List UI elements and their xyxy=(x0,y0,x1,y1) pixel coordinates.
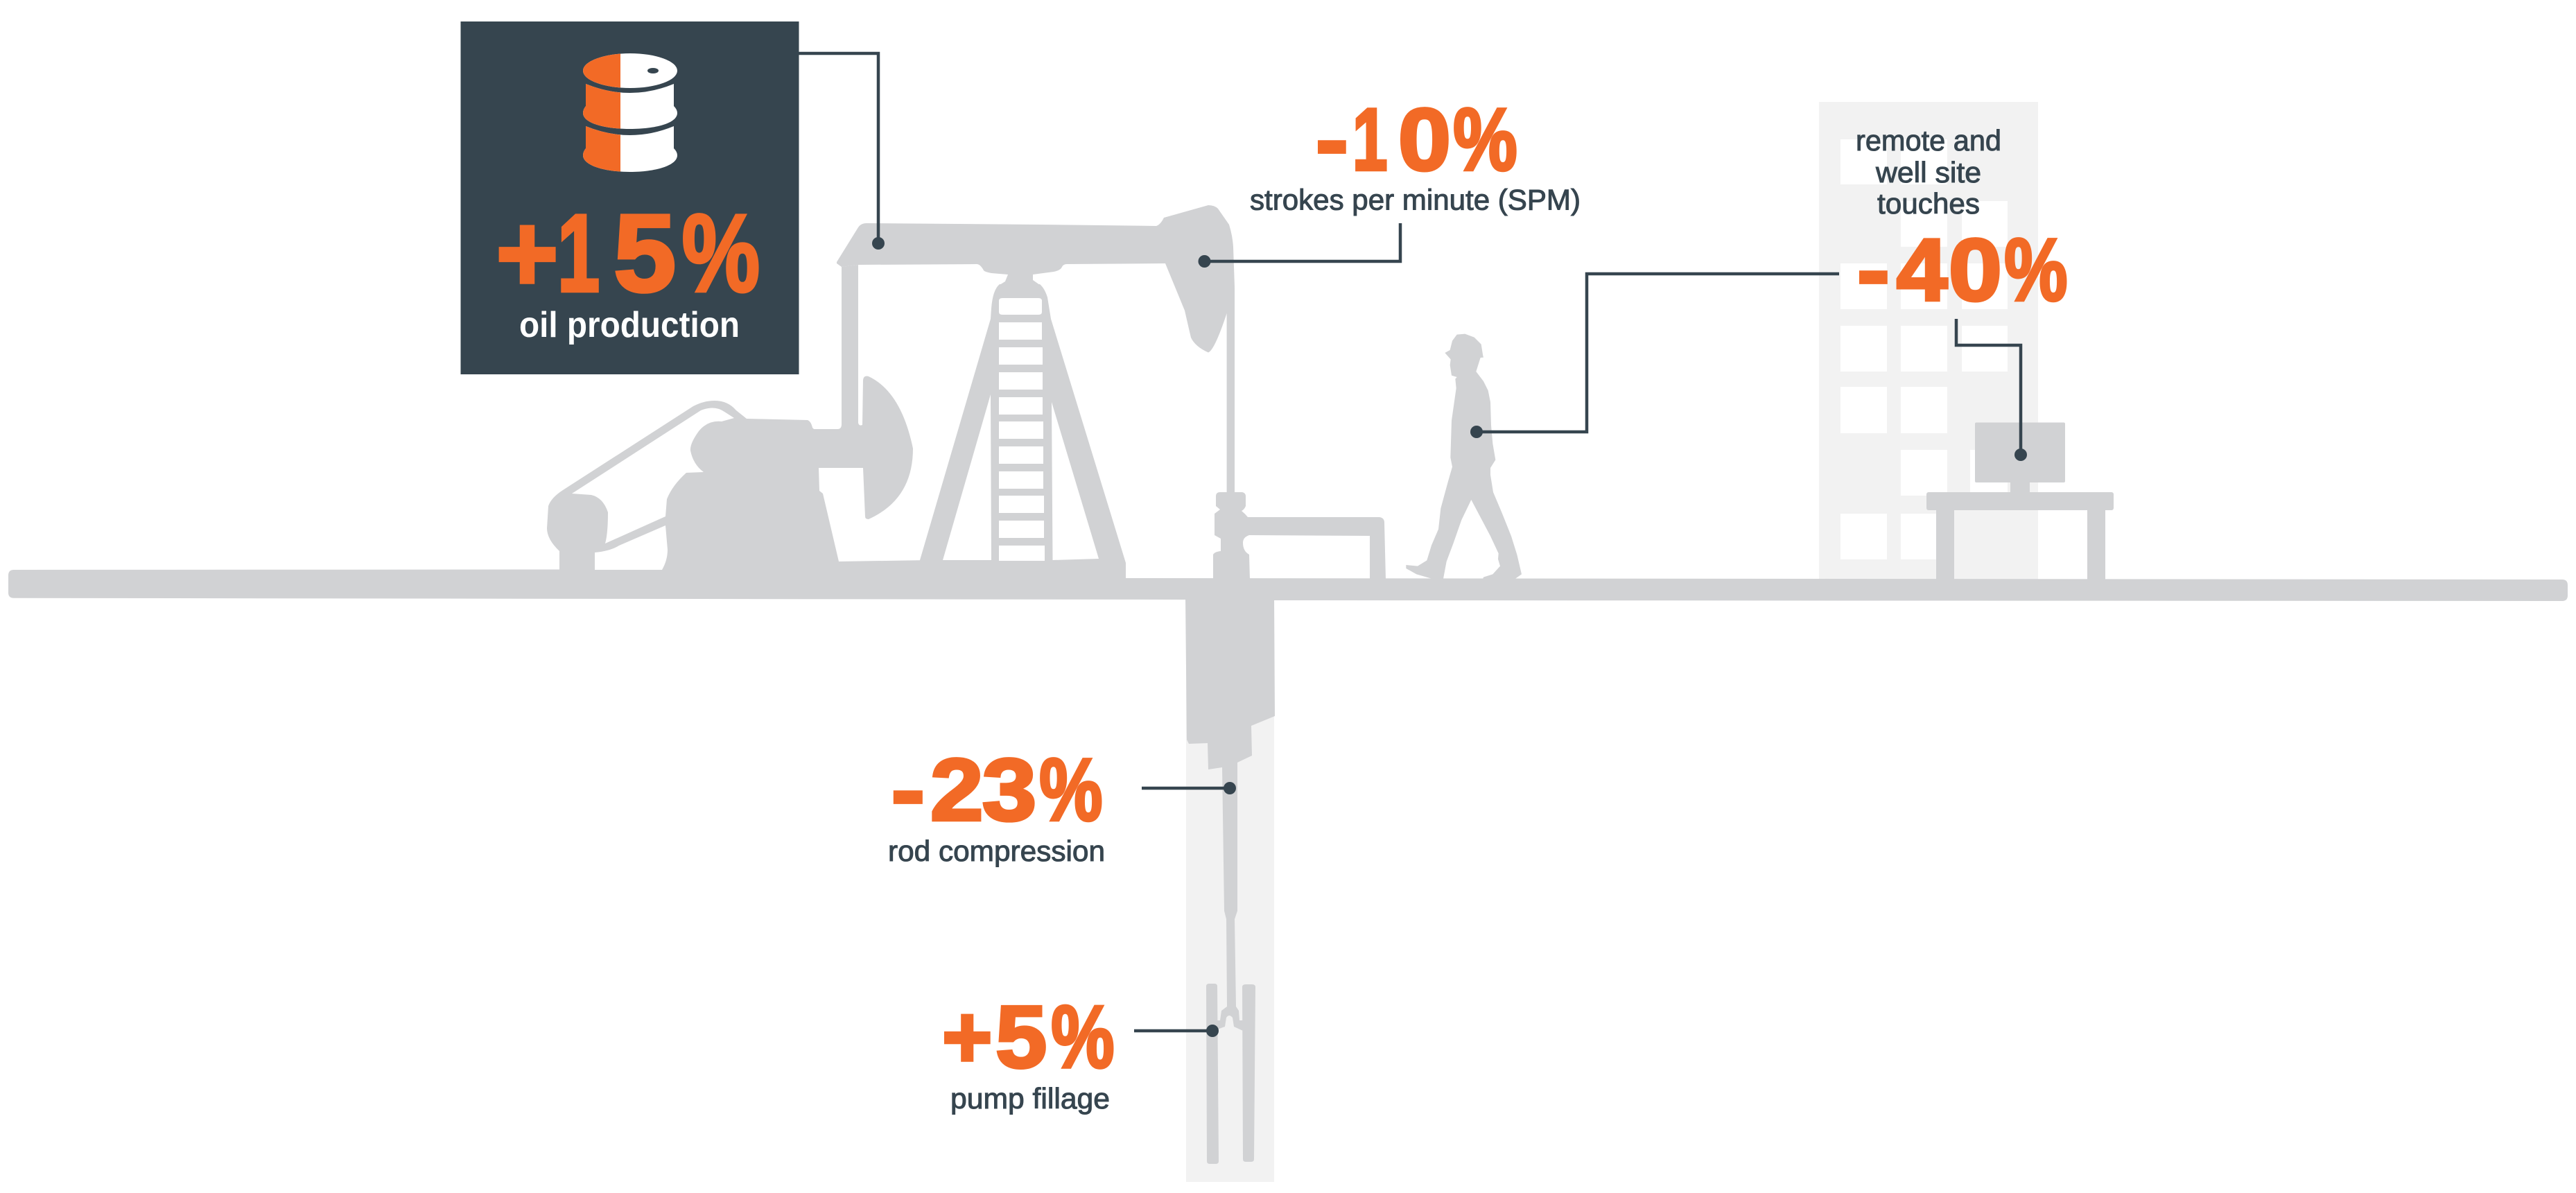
stat: +15%: 1 xyxy=(557,191,600,315)
stat: -10%: % xyxy=(1453,90,1517,189)
office building xyxy=(1819,102,2038,580)
wellbore background strip xyxy=(1186,596,1274,1182)
label: remote and well site touches: touches xyxy=(1877,187,1980,220)
polished rod, wellhead and flow line xyxy=(1213,287,1386,580)
connector: touches to worker xyxy=(1470,274,1839,438)
stat: -40%: 0 xyxy=(1949,220,2002,319)
stat: -23%: % xyxy=(1039,740,1102,839)
stat: -10%: - xyxy=(1316,90,1348,189)
stat: +15%: + xyxy=(496,191,559,315)
stat: -23%: - xyxy=(891,740,925,839)
connector: rod compression xyxy=(1142,782,1236,794)
connector: pump fillage xyxy=(1134,1025,1219,1037)
label: remote and well site touches: remote and xyxy=(1856,124,2001,157)
worker silhouette xyxy=(1406,334,1522,580)
stat: +5%: 5 xyxy=(995,987,1047,1086)
label: rod compression: rod compression xyxy=(888,835,1105,867)
stat: +5%: % xyxy=(1051,987,1114,1086)
label: strokes per minute: strokes per minute (SPM) xyxy=(1250,184,1581,216)
stat: -40%: % xyxy=(2004,220,2067,319)
panel: oil production xyxy=(460,21,799,374)
connector: touches to monitor xyxy=(1956,319,2027,461)
icon: oil barrel xyxy=(583,53,677,172)
stat: -40%: - xyxy=(1857,220,1890,319)
stat: -40%: 4 xyxy=(1897,220,1947,319)
label: oil production: oil production xyxy=(519,305,740,345)
walking beam and horsehead xyxy=(837,205,1235,352)
ground line xyxy=(8,570,2568,601)
label: remote and well site touches xyxy=(1856,124,2001,220)
connector: SPM to horsehead xyxy=(1198,223,1400,268)
samson post, crank, counterweight, engine and belt xyxy=(547,265,929,575)
label: remote and well site touches: well site xyxy=(1875,156,1981,189)
stat: -10%: 1 xyxy=(1352,90,1388,189)
desk with computer monitor xyxy=(1926,423,2114,580)
stat: +15%: 5 xyxy=(613,191,676,315)
stat: -23%: 3 xyxy=(982,740,1036,839)
stat: +15%: % xyxy=(682,191,760,315)
A-frame tower with ladder xyxy=(920,284,1126,582)
connector: oil production to beam xyxy=(799,53,885,250)
stat: +5%: + xyxy=(942,987,993,1086)
stat: -10%: 0 xyxy=(1398,90,1451,189)
stat: -23%: 2 xyxy=(930,740,983,839)
label: pump fillage: pump fillage xyxy=(950,1082,1110,1115)
downhole casing, rod and pump xyxy=(1185,596,1275,1164)
pump jack xyxy=(547,205,1386,582)
